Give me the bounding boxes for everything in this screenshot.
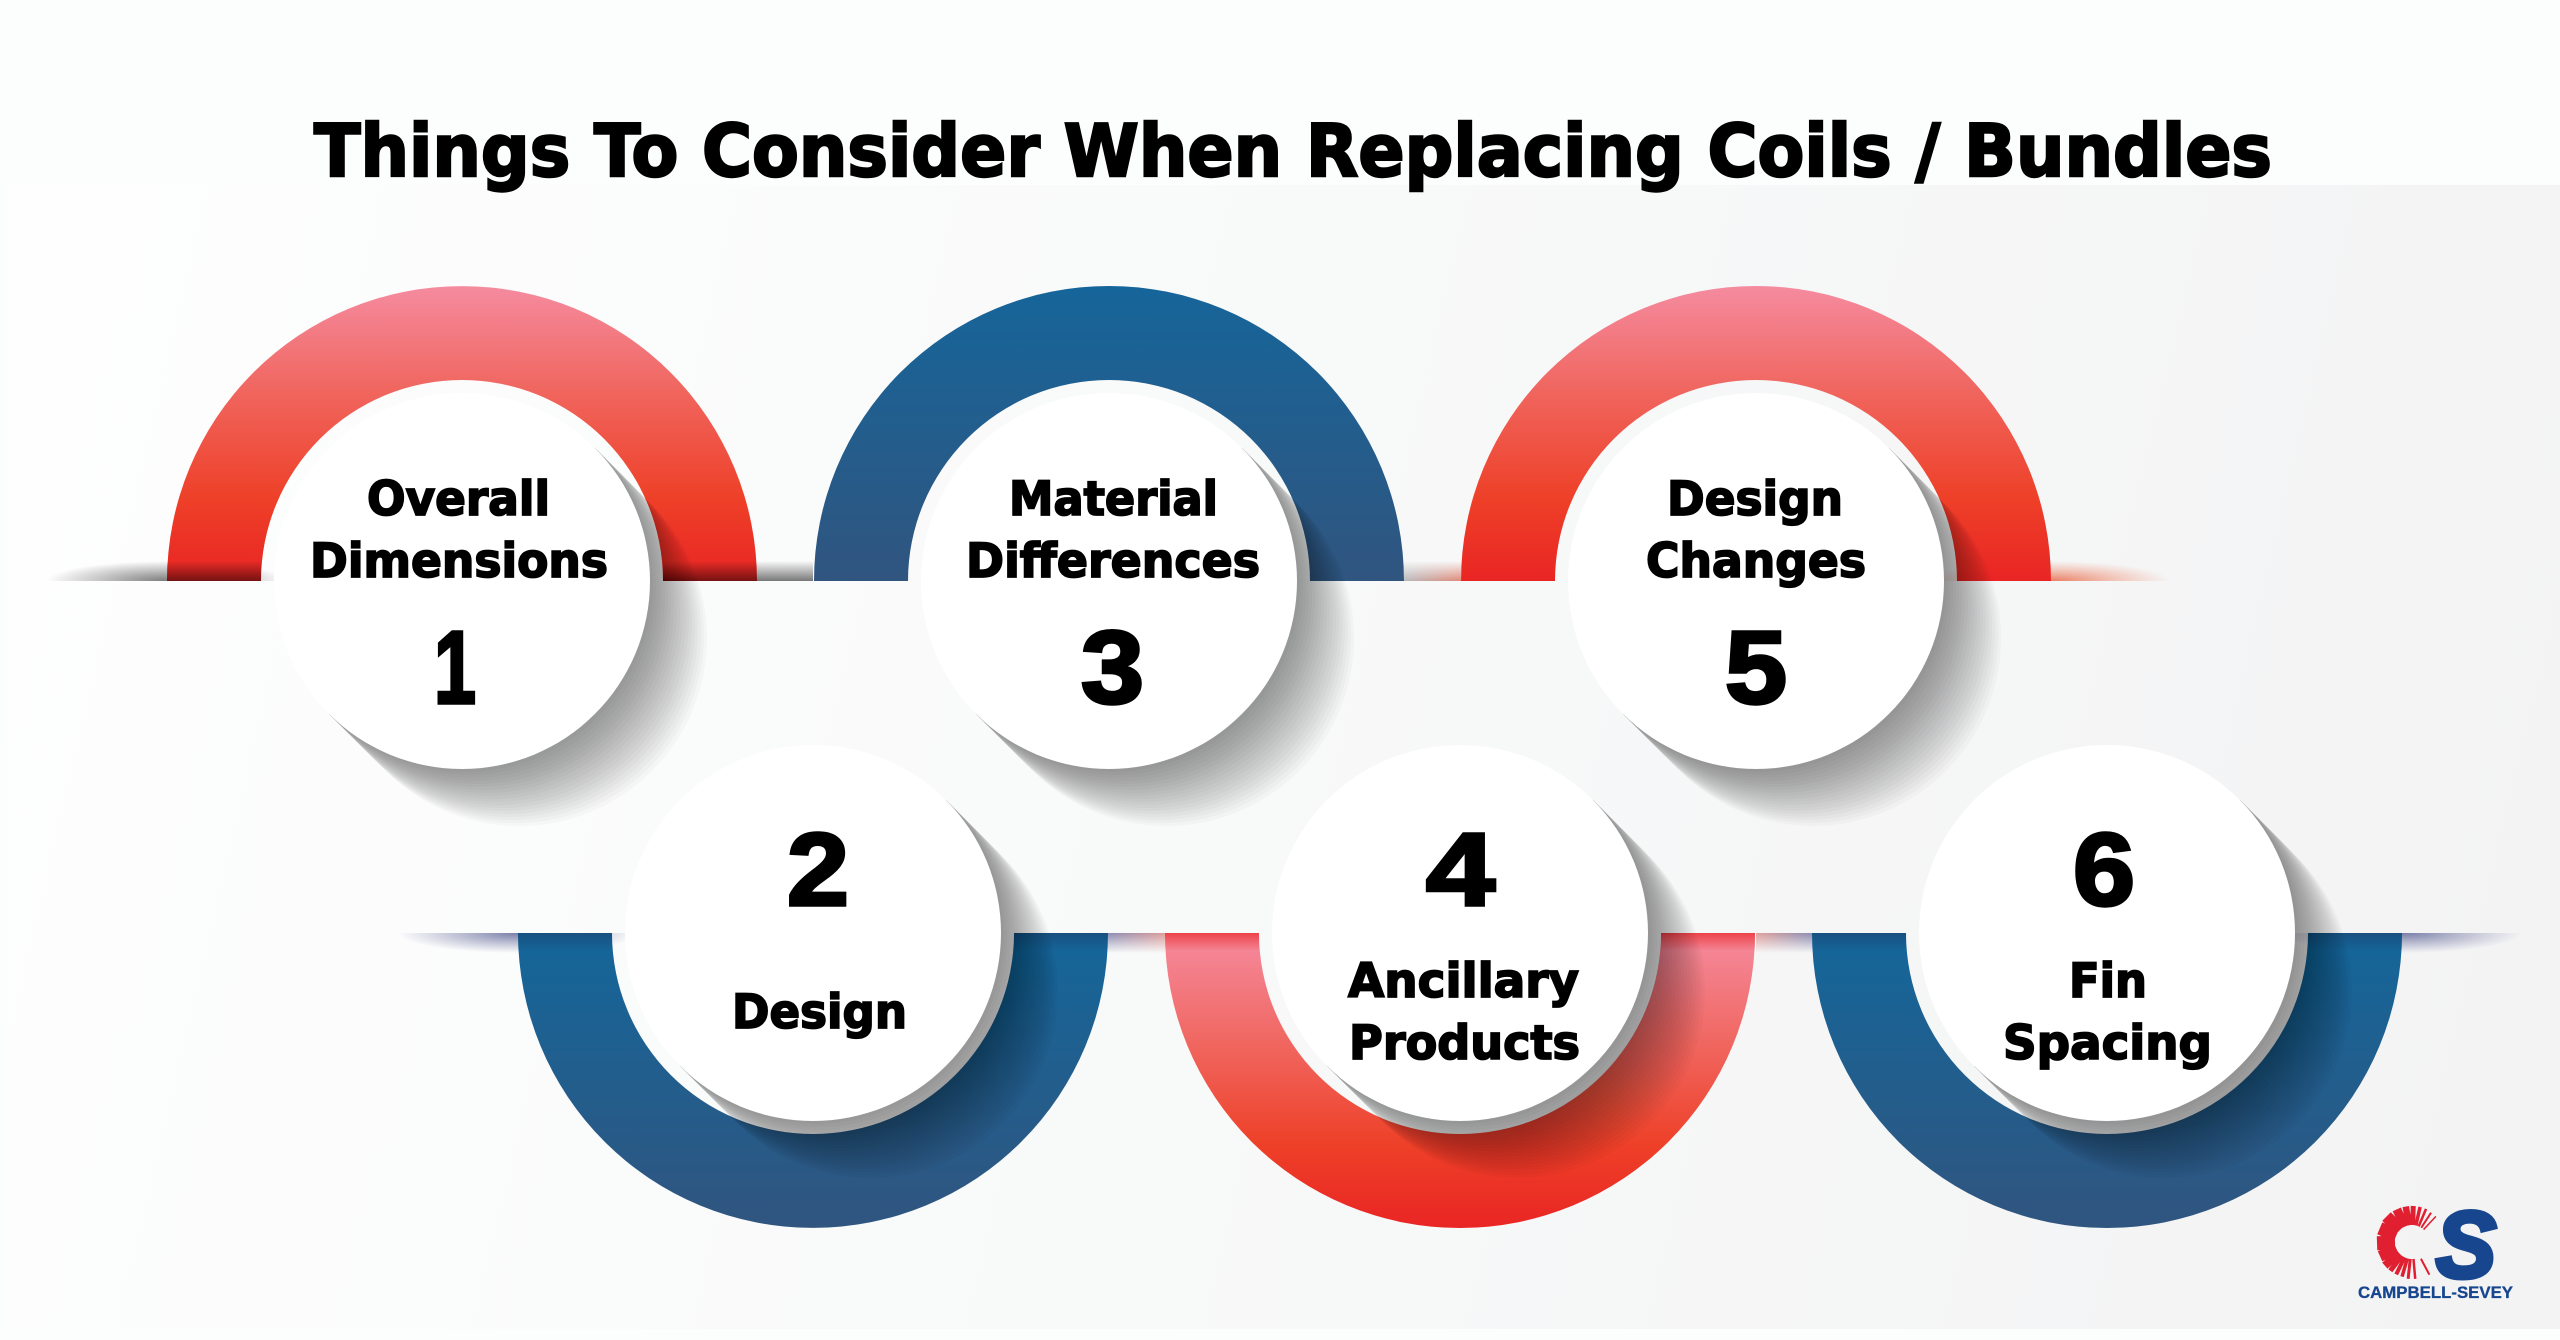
label: Dimensions: [310, 534, 608, 589]
number: 1: [434, 610, 476, 725]
number: 4: [1426, 812, 1495, 927]
white circle: [1272, 745, 1648, 1121]
label: [2003, 954, 2212, 1071]
logo: Campbell-Sevey: [2358, 1192, 2513, 1302]
label: Material: [1009, 472, 1218, 527]
circle shadow: [1327, 800, 1705, 1178]
label: Design: [1667, 472, 1843, 527]
label: Ancillary: [1348, 954, 1579, 1009]
title: Things To Consider When Replacing Coils / Bundles: [314, 109, 2272, 193]
blue arch: [518, 933, 1108, 1228]
white circle: [274, 393, 650, 769]
white circle: [625, 745, 1001, 1121]
step 3: material differences: [814, 286, 1404, 826]
step 4: ancillary products: [1165, 745, 1755, 1228]
number: 5: [1725, 610, 1787, 725]
white circle: [1919, 745, 2295, 1121]
label: Fin: [2069, 954, 2147, 1009]
red arch: [1165, 933, 1755, 1228]
label: [1646, 472, 1866, 589]
label: Differences: [966, 534, 1260, 589]
lower edge shadow strip: [406, 933, 2512, 952]
step 5: design changes: [1461, 286, 2051, 826]
label: Overall: [367, 472, 550, 527]
number: 2: [787, 812, 849, 927]
step 6: fin spacing: [1812, 745, 2402, 1228]
white circle: [921, 393, 1297, 769]
red arch: [1461, 286, 2051, 581]
circle shadow: [329, 448, 707, 826]
blue arch: [1812, 933, 2402, 1228]
upper edge shadow strip: [55, 562, 2162, 581]
circle shadow: [1623, 448, 2001, 826]
blue arch: [814, 286, 1404, 581]
number: 3: [1081, 610, 1144, 725]
label: Spacing: [2003, 1016, 2212, 1071]
label: Changes: [1646, 534, 1866, 589]
step 1: overall dimensions: [167, 286, 757, 826]
white circle: [1568, 393, 1944, 769]
icon: blue S: S: [2436, 1192, 2496, 1297]
label: [1348, 954, 1580, 1071]
icon: red sunburst C: [2377, 1206, 2436, 1279]
circle shadow: [976, 448, 1354, 826]
label: Products: [1349, 1016, 1580, 1071]
label: [966, 472, 1260, 589]
step 2: design: [518, 745, 1108, 1228]
logo wordmark: CAMPBELL-SEVEY: [2358, 1284, 2513, 1302]
red arch: [167, 286, 757, 581]
number: 6: [2073, 812, 2135, 927]
label: Design: [732, 985, 907, 1040]
circle shadow: [1974, 800, 2352, 1178]
label: [310, 472, 608, 589]
circle shadow: [680, 800, 1058, 1178]
